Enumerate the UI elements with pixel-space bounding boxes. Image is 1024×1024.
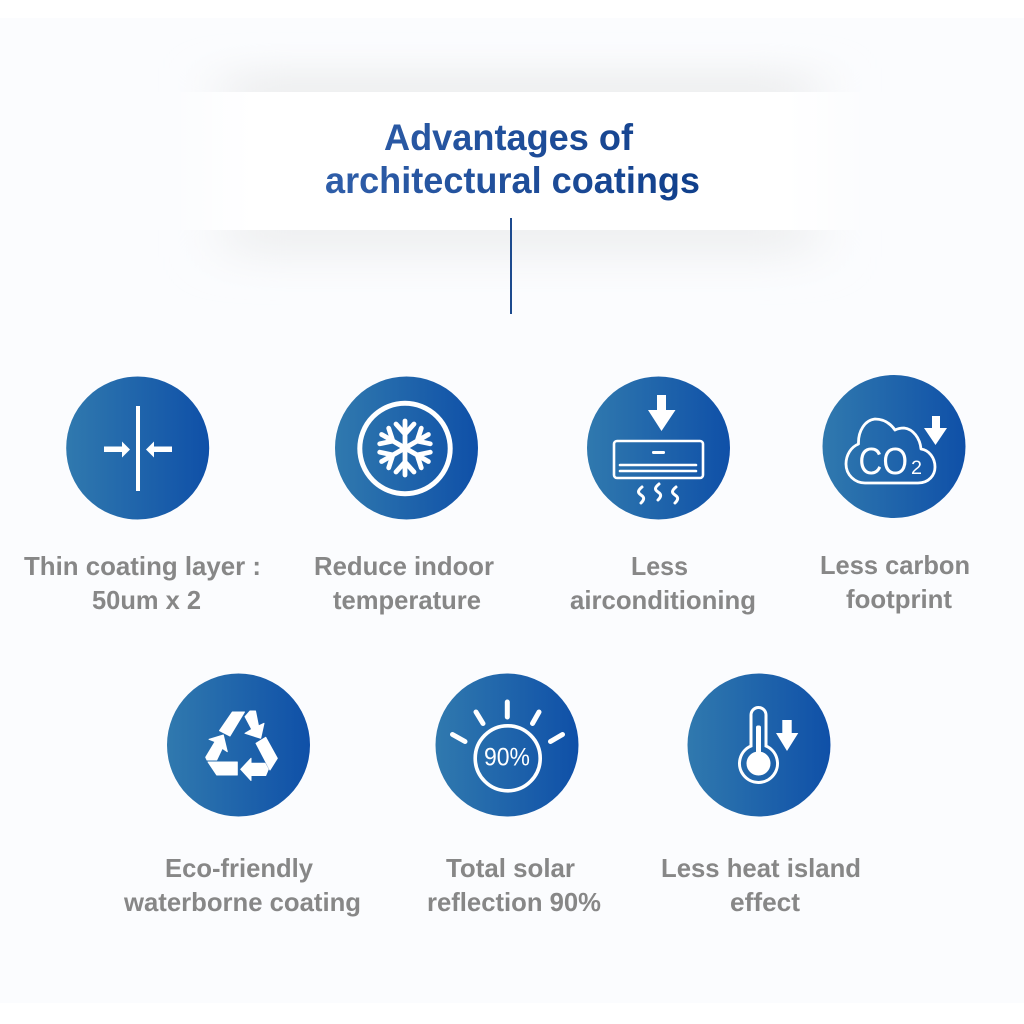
band highlight (170, 92, 870, 230)
item: reduce indoor temperature (314, 376, 494, 615)
label: thin coating layer (24, 551, 261, 615)
item: thin coating layer (24, 376, 261, 615)
title: Advantages of (384, 117, 634, 158)
label: total solar reflection (427, 853, 601, 917)
label: total solar reflection: Total solar (446, 853, 575, 883)
label: less carbon footprint (820, 550, 970, 614)
label: less heat island effect: Less heat island (661, 853, 861, 883)
label: less airconditioning: airconditioning (570, 585, 756, 615)
label: less airconditioning: Less (631, 551, 688, 581)
label: eco-friendly waterborne coating: Eco-friendly (165, 853, 314, 883)
icon: sun 90% (436, 674, 578, 816)
icon: snowflake (335, 376, 478, 520)
icon: recycle (167, 674, 310, 816)
item: less heat island effect (661, 674, 861, 917)
label: total solar reflection: reflection 90% (427, 887, 601, 917)
icon: CO2 cloud: CO (858, 441, 908, 483)
bottom band shadow (239, 230, 801, 252)
label: eco-friendly waterborne coating (123, 853, 361, 917)
label: less heat island effect: effect (730, 887, 800, 917)
label: thin coating layer: 50um x 2 (92, 585, 201, 615)
item: less airconditioning (570, 376, 756, 615)
label: less heat island effect (661, 853, 861, 917)
item: eco-friendly waterborne coating (123, 674, 361, 917)
label: reduce indoor temperature: Reduce indoor (314, 551, 494, 581)
item: total solar reflection (427, 674, 601, 917)
label: less carbon footprint: footprint (846, 584, 952, 614)
label: thin coating layer: Thin coating layer : (24, 551, 261, 581)
title (325, 117, 700, 201)
label: eco-friendly waterborne coating: waterborne coating (123, 887, 361, 917)
icon: air conditioner (587, 376, 730, 520)
item: less carbon footprint (820, 375, 970, 614)
icon: CO2 cloud (822, 375, 966, 518)
label: less carbon footprint: Less carbon (820, 550, 970, 580)
icon: thermometer (688, 674, 830, 816)
label: reduce indoor temperature (314, 551, 494, 615)
header band (170, 68, 870, 257)
top band shadow (236, 72, 804, 92)
icon: sun 90%: 90% (484, 744, 530, 772)
icon: CO2 cloud: 2 (911, 458, 922, 479)
icon: thin coating layer (66, 376, 209, 520)
label: reduce indoor temperature: temperature (333, 585, 481, 615)
connector line (510, 218, 512, 314)
label: less airconditioning (570, 551, 756, 615)
title: architectural coatings (325, 160, 700, 201)
